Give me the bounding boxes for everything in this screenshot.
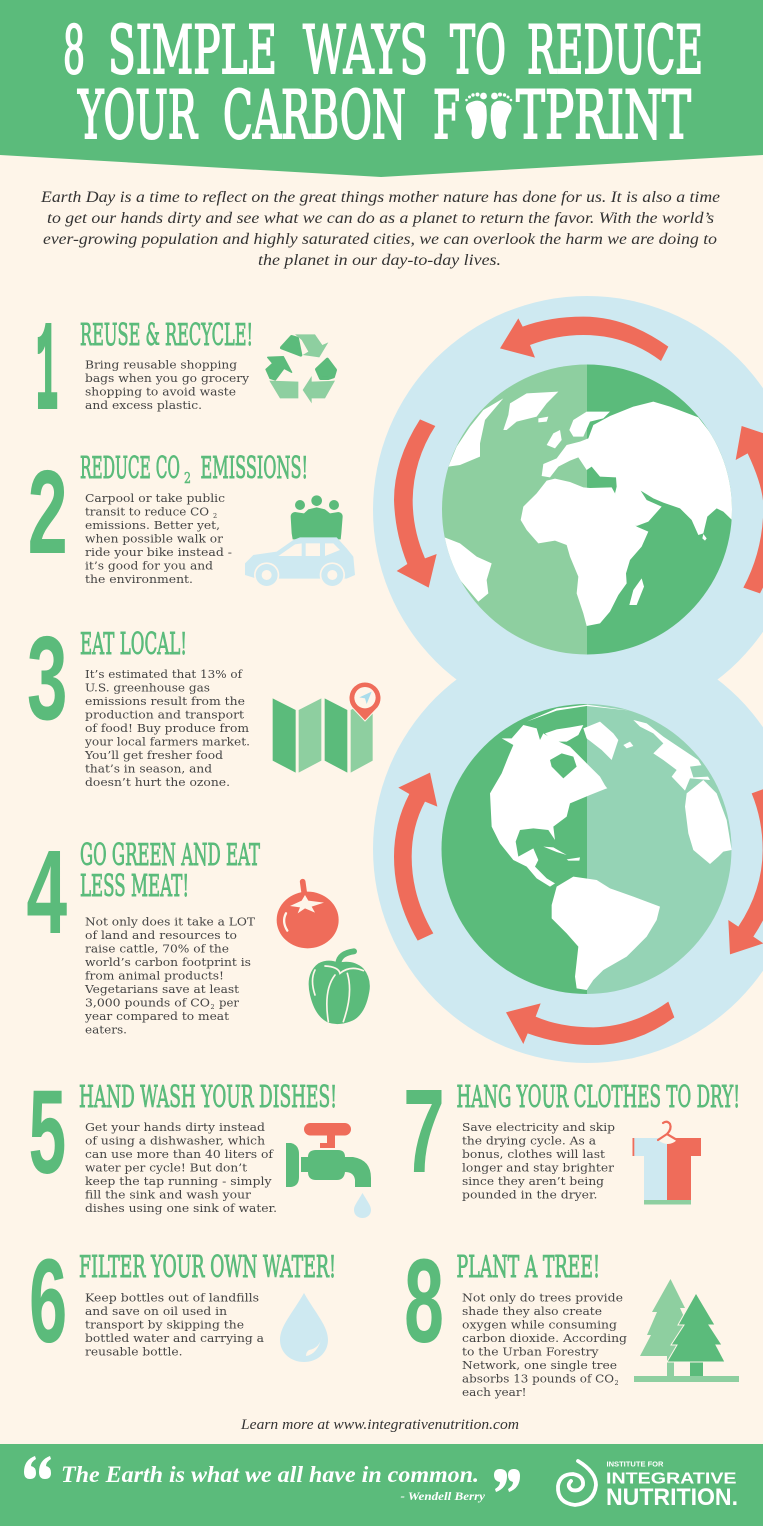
arrows around top globe [394, 317, 763, 593]
title: WAYS [303, 12, 428, 89]
step 2: reduce CO2 emissions [26, 451, 355, 591]
step 6: filter your own water [27, 1241, 336, 1380]
text block: shopping to avoid waste [85, 384, 236, 398]
text block: 2 [614, 1379, 619, 1387]
text block: You’ll get fresher food [84, 748, 224, 762]
heading: PLANT A TREE! [456, 1250, 600, 1285]
text block: absorbs 13 pounds of CO [462, 1372, 614, 1386]
text block: 2 [213, 512, 217, 520]
title: TO [450, 12, 506, 89]
text block: Network, one single tree [462, 1358, 617, 1372]
icon: water drop [280, 1293, 328, 1362]
text block: Not only does it take a LOT [85, 914, 255, 928]
text block: bonus, clothes will last [462, 1147, 605, 1161]
text block: the environment. [85, 572, 193, 586]
text block: reusable bottle. [85, 1344, 182, 1358]
logo: Institute for Integrative Nutrition [558, 1461, 738, 1511]
title: CARBON [223, 77, 406, 154]
text block [85, 1120, 277, 1215]
text block: from animal products! [85, 968, 224, 982]
icon: bell pepper [309, 951, 370, 1024]
step 1: reuse and recycle [36, 305, 335, 445]
text block: per [219, 996, 240, 1010]
text block: to the Urban Forestry [462, 1344, 599, 1358]
title [63, 12, 703, 154]
text block: Get your hands dirty instead [85, 1120, 266, 1134]
text block [462, 1290, 628, 1399]
icon: footprints [465, 92, 512, 139]
text block: Bring reusable shopping [85, 358, 238, 372]
icon: shirt on hanger [632, 1122, 701, 1204]
icon: people on car [245, 495, 355, 588]
text block: doesn’t hurt the ozone. [85, 775, 230, 789]
text block: Save electricity and skip [462, 1120, 615, 1134]
step 2: reduce CO2 emissions: 2 [26, 451, 69, 591]
text block: keep the tap running - simply [85, 1174, 272, 1188]
title: YOUR [77, 77, 198, 154]
heading: 2 [184, 469, 191, 487]
heading: HAND WASH YOUR DISHES! [79, 1080, 337, 1115]
text block: and save on oil used in [85, 1304, 228, 1318]
text block [84, 914, 255, 1036]
learn more link text: Learn more at www.integrativenutrition.com [240, 1417, 519, 1433]
heading: LESS MEAT! [80, 869, 189, 904]
heading: GO GREEN AND EAT [80, 838, 260, 873]
text block: bags when you go grocery [85, 371, 250, 385]
text block: transit to reduce CO [85, 504, 209, 518]
intro text: to get our hands dirty and see what we can do as a planet to return the favor. With the world’s [47, 210, 714, 227]
logo: Institute for Integrative Nutrition: INSTITUTE FOR [606, 1462, 664, 1468]
quote attribution: - Wendell Berry [400, 1489, 486, 1503]
step 8: plant a tree: 8 [403, 1240, 445, 1380]
text block: water per cycle! But don’t [85, 1160, 247, 1174]
step 1: reuse and recycle: 1 [36, 305, 58, 445]
text block: It’s estimated that 13% of [85, 667, 243, 681]
heading: REUSE & RECYCLE! [80, 318, 253, 353]
text block: carbon dioxide. According [462, 1331, 628, 1345]
icon: trees [634, 1279, 739, 1382]
text block: dishes using one sink of water. [85, 1201, 277, 1215]
text block: of using a dishwasher, which [85, 1134, 266, 1148]
text block: Vegetarians save at least [84, 982, 239, 996]
text block: when possible walk or [85, 532, 224, 546]
title: F [433, 77, 460, 154]
globe: Africa and Europe [438, 364, 733, 656]
text block: of land and resources to [85, 928, 237, 942]
text block [85, 491, 232, 586]
heading [80, 838, 260, 904]
step 5: hand wash your dishes: 5 [27, 1070, 68, 1210]
background circles [373, 296, 763, 1063]
intro text: Earth Day is a time to reflect on the great things mother nature has done for us. It is also a time [40, 189, 720, 206]
text block: each year! [462, 1385, 526, 1399]
text block: 2 [210, 1003, 215, 1011]
intro text: the planet in our day-to-day lives. [258, 252, 501, 269]
text block: of food! Buy produce from [85, 721, 249, 735]
text block: Not only do trees provide [462, 1290, 623, 1304]
text block: longer and stay brighter [462, 1160, 615, 1174]
text block: U.S. greenhouse gas [85, 680, 210, 694]
text block: it’s good for you and [85, 558, 214, 572]
step 5: hand wash your dishes [27, 1070, 371, 1218]
step 4: go green and eat less meat [25, 829, 370, 1036]
text block: emissions. Better yet, [85, 518, 220, 532]
text block: and excess plastic. [85, 398, 202, 412]
heading: FILTER YOUR OWN WATER! [79, 1250, 336, 1285]
text block: can use more than 40 liters of [85, 1147, 274, 1161]
text block: 3,000 pounds of CO [85, 996, 210, 1010]
text block: pounded in the dryer. [462, 1188, 598, 1202]
text block: your local farmers market. [84, 734, 250, 748]
step 6: filter your own water: 6 [27, 1241, 69, 1380]
text block: Carpool or take public [85, 491, 225, 505]
step 3: eat local [25, 617, 381, 789]
step 4: go green and eat less meat: 4 [25, 829, 69, 971]
globe: Americas [441, 704, 733, 995]
text block [84, 667, 250, 789]
text block: fill the sink and wash your [85, 1188, 252, 1202]
heading: EAT LOCAL! [80, 627, 187, 662]
text block: since they aren’t being [462, 1174, 605, 1188]
text block: transport by skipping the [85, 1318, 244, 1332]
quote marks [24, 1456, 520, 1492]
step 3: eat local: 3 [25, 617, 69, 757]
panel: globes illustration [373, 296, 763, 1063]
text block: world’s carbon footprint is [85, 955, 251, 969]
text block: eaters. [85, 1022, 127, 1036]
text block: ride your bike instead - [85, 545, 232, 559]
icon: tomato [277, 882, 339, 948]
title: 8 [63, 12, 85, 89]
text block: production and transport [85, 708, 244, 722]
text block: raise cattle, 70% of the [85, 942, 229, 956]
icon: map with pin [273, 682, 381, 773]
text block: the drying cycle. As a [462, 1134, 596, 1148]
header banner [0, 0, 763, 177]
intro text [40, 189, 720, 269]
intro text: ever-growing population and highly saturated cities, we can overlook the harm we are doing to [43, 231, 717, 248]
step 8: plant a tree [403, 1240, 739, 1399]
text block [462, 1120, 615, 1202]
logo: Institute for Integrative Nutrition: NUTRITION. [606, 1484, 738, 1511]
heading: EMISSIONS! [200, 451, 308, 486]
step 7: hang your clothes to dry: 7 [402, 1069, 446, 1210]
step 7: hang your clothes to dry [402, 1069, 740, 1210]
footer band [0, 1444, 763, 1526]
text block: shade they also create [462, 1304, 602, 1318]
text block: year compared to meat [84, 1009, 229, 1023]
text block [85, 1290, 264, 1358]
text block: emissions result from the [85, 694, 245, 708]
icon: recycle [266, 334, 335, 403]
text block: that’s in season, and [85, 762, 213, 776]
text block: oxygen while consuming [462, 1318, 618, 1332]
logo: Institute for Integrative Nutrition: INTEGRATIVE [606, 1470, 737, 1488]
heading: REDUCE CO [80, 451, 180, 486]
text block [85, 358, 250, 412]
arrows around bottom globe [394, 773, 763, 1045]
text block: Keep bottles out of landfills [85, 1290, 259, 1304]
icon: faucet with drop [286, 1123, 371, 1218]
title: SIMPLE [108, 12, 277, 89]
quote: The Earth is what we all have in common. [61, 1462, 479, 1487]
text block: bottled water and carrying a [85, 1331, 264, 1345]
